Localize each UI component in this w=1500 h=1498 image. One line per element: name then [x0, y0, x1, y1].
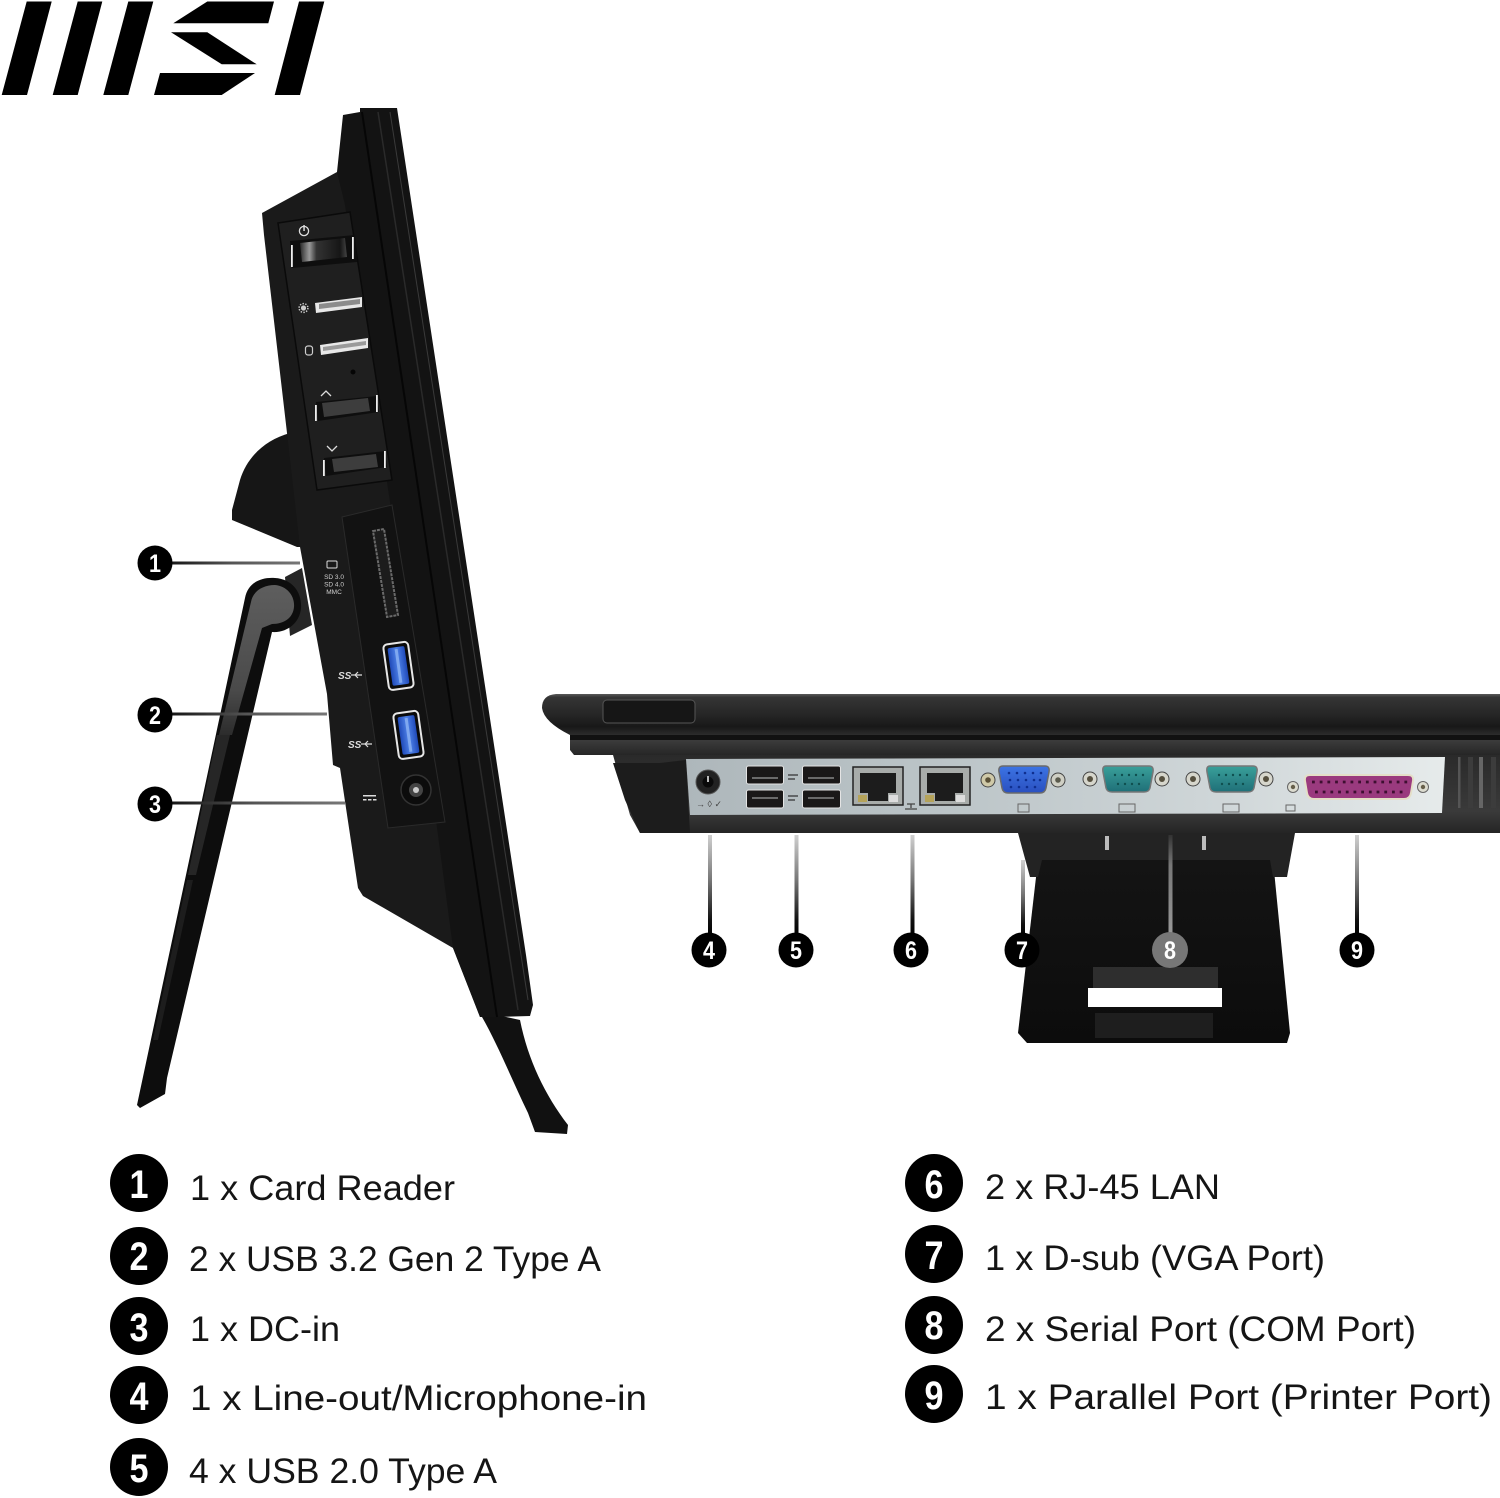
- legend item 5: 5: [130, 1447, 148, 1491]
- leader line 1: [165, 562, 300, 564]
- callout marker 7: 7: [1016, 937, 1028, 965]
- leader line 5: [794, 835, 798, 935]
- bezel lower strip: [570, 740, 1500, 755]
- MSI logo: [2, 2, 324, 95]
- DC symbol: [363, 795, 376, 800]
- tilt hinge knob: [232, 433, 305, 547]
- legend item 2: [110, 1227, 602, 1285]
- front foot: [482, 1015, 568, 1134]
- leader line 4: [708, 835, 712, 935]
- storage button: [306, 338, 368, 355]
- legend item 3: 1 x DC-in: [190, 1310, 340, 1349]
- VGA port: [981, 766, 1065, 812]
- legend item 3: [110, 1297, 340, 1355]
- legend item 1: 1: [130, 1163, 148, 1207]
- audio jack: → ◊ ✓: [696, 799, 722, 809]
- legend item 6: 6: [924, 1163, 944, 1207]
- callout marker 9: [1340, 932, 1374, 968]
- USB 3.2 port lower: [393, 710, 424, 759]
- leader line 6: [910, 835, 914, 935]
- callout marker 6: [894, 932, 928, 968]
- legend item 1: [110, 1154, 455, 1212]
- callout marker 7: [1004, 932, 1040, 968]
- indicator hole: [350, 370, 356, 374]
- LAN icon: [905, 804, 917, 809]
- USB logos: SS: [338, 671, 352, 682]
- callout marker 1: 1: [149, 550, 161, 578]
- legend item 5: [110, 1438, 498, 1496]
- legend item 3: 3: [130, 1306, 148, 1350]
- stand upper bracket: [1018, 833, 1295, 877]
- stand handle recess: [1093, 967, 1218, 988]
- bottom view of monitor: [542, 694, 1500, 1043]
- callout marker 1: [138, 546, 172, 580]
- stand tab: [1095, 1013, 1213, 1038]
- legend item 7: 1 x D-sub (VGA Port): [985, 1239, 1325, 1278]
- leader line 8: [1168, 835, 1172, 935]
- bezel side button: [603, 700, 695, 723]
- card reader labels: MMC: [326, 589, 342, 596]
- serial port 1: [1083, 766, 1169, 812]
- legend item 9: [905, 1365, 1492, 1423]
- leader line 7: [1021, 860, 1025, 935]
- button panel: [278, 212, 392, 490]
- callout marker 6: 6: [905, 937, 917, 965]
- leader line 2: [165, 712, 327, 716]
- audio jack: [696, 770, 722, 809]
- DC-in jack: [401, 775, 431, 805]
- legend item 6: 2 x RJ-45 LAN: [985, 1168, 1220, 1207]
- legend item 2: 2 x USB 3.2 Gen 2 Type A: [189, 1240, 602, 1279]
- callout marker 8: 8: [1164, 937, 1176, 965]
- legend item 5: 4 x USB 2.0 Type A: [189, 1452, 498, 1491]
- card reader labels: SD 3.0: [324, 574, 344, 581]
- down button: [323, 446, 387, 476]
- legend item 1: 1 x Card Reader: [190, 1169, 455, 1208]
- callout marker 2: [138, 698, 172, 732]
- callout marker 3: [138, 786, 172, 822]
- legend item 9: 9: [924, 1374, 944, 1418]
- legend item 4: 1 x Line-out/Microphone-in: [190, 1379, 647, 1418]
- callout marker 2: 2: [149, 702, 161, 730]
- callout marker 3: 3: [149, 791, 161, 819]
- silver port plate: [686, 757, 1445, 815]
- parallel port: [1286, 775, 1428, 811]
- bezel top: [542, 694, 1500, 735]
- side view of monitor: [137, 108, 568, 1134]
- chassis body: [613, 755, 1500, 833]
- legend item 7: [905, 1225, 1325, 1283]
- leader line 9: [1355, 835, 1359, 935]
- monitor bezel: [337, 108, 533, 1017]
- callout marker 9: 9: [1351, 937, 1363, 965]
- USB 3.2 port upper: [383, 641, 414, 690]
- legend item 8: [905, 1296, 1416, 1354]
- callout marker 5: [778, 932, 814, 968]
- legend right column: [905, 1154, 1492, 1423]
- card reader labels: SD 4.0: [324, 582, 344, 588]
- port panel: [342, 505, 445, 828]
- USB logos: SS: [348, 740, 362, 751]
- USB 2.0 ports: [746, 766, 840, 808]
- legend item 4: [110, 1366, 647, 1424]
- rear housing: [262, 170, 497, 1017]
- callout marker 4: 4: [703, 937, 715, 965]
- vent slats: [1458, 757, 1496, 808]
- legend item 4: 4: [130, 1375, 149, 1419]
- legend left column: [110, 1154, 647, 1496]
- legend item 8: 2 x Serial Port (COM Port): [985, 1310, 1416, 1349]
- up button: [315, 391, 379, 421]
- callout marker 4: [692, 932, 726, 968]
- legend item 2: 2: [130, 1235, 148, 1279]
- USB logos: [338, 671, 372, 751]
- rear stand plate: [1018, 833, 1295, 1043]
- LAN port 2: [920, 767, 970, 805]
- stand handle opening: [1088, 988, 1222, 1007]
- rear stand leg: [137, 578, 301, 1108]
- brightness button: [299, 297, 362, 313]
- callout marker 5: 5: [790, 937, 802, 965]
- leader line 3: [165, 802, 345, 804]
- LAN port 1: [853, 767, 903, 805]
- legend item 7: 7: [924, 1234, 944, 1278]
- callout marker 8: [1152, 932, 1188, 968]
- card reader slot: [373, 529, 398, 617]
- card reader labels: [324, 561, 344, 596]
- hinge bracket behind stand: [285, 568, 312, 636]
- legend item 6: [905, 1154, 1220, 1212]
- power button: [290, 225, 357, 268]
- legend item 8: 8: [924, 1304, 944, 1348]
- serial port 2: [1186, 766, 1273, 812]
- legend item 9: 1 x Parallel Port (Printer Port): [985, 1378, 1492, 1417]
